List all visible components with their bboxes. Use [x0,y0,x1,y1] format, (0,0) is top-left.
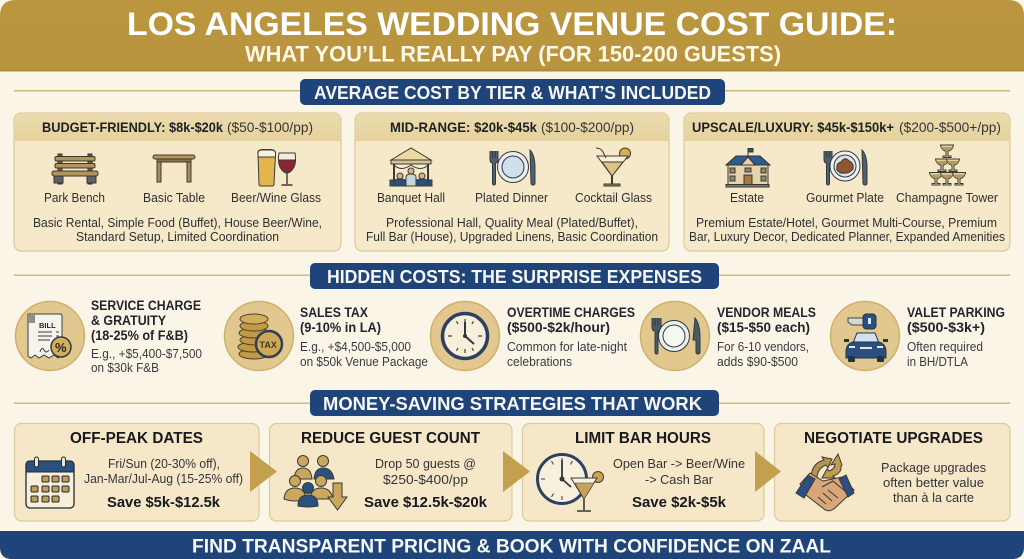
panel: reduce guest count [270,424,512,521]
tier description: Standard Setup, Limited Coordination [76,229,279,244]
title: LOS ANGELES WEDDING VENUE COST GUIDE: [127,6,897,42]
heading: SALES TAX [300,305,368,320]
heading: VENDOR MEALS [717,305,816,320]
section heading: money-saving strategies [310,390,719,416]
arrow: step 1 to 2 [250,451,277,492]
detail: celebrations [507,354,572,369]
detail: Common for late-night [507,339,627,354]
tier heading: UPSCALE/LUXURY: $45k-$150k+ [692,119,894,135]
heading: ($500-$2k/hour) [507,320,610,335]
detail: adds $90-$500 [717,354,798,369]
label: gourmet plate: Gourmet Plate [806,190,884,205]
label: beer/wine glass: Beer/Wine Glass [231,190,321,205]
label: park bench: Park Bench [44,190,105,205]
label: cocktail glass: Cocktail Glass [575,190,652,205]
heading: SERVICE CHARGE [91,298,201,313]
label: plated dinner: Plated Dinner [475,190,549,205]
section heading: hidden costs: HIDDEN COSTS: THE SURPRISE EXPENSES [327,267,702,287]
icon: beer and wine glass [258,150,296,186]
icon: cocktail glass [596,148,630,186]
tier description: Basic Rental, Simple Food (Buffet), House Beer/Wine, [33,215,322,230]
icon: calendar [26,457,74,508]
tier heading: ($100-$200/pp) [541,119,634,135]
hidden cost: service charge and gratuity [16,298,202,375]
tier heading: ($50-$100/pp) [227,119,313,135]
detail: E.g., +$4,500-$5,000 [300,339,411,354]
icon: champagne tower [930,145,966,185]
strategy detail: often better value [883,475,984,490]
strategy detail: Jan-Mar/Jul-Aug (15-25% off) [84,471,243,486]
heading: (18-25% of F&B) [91,328,188,343]
hidden cost: valet parking [830,302,1005,370]
hidden cost: vendor meals [640,302,816,370]
panel: off-peak dates [14,424,259,521]
icon: clock and cocktail [538,454,604,511]
title banner [0,0,1024,72]
heading: & GRATUITY [91,313,166,328]
strategy detail: Open Bar -> Beer/Wine [613,456,745,471]
icon: basic table [153,155,195,182]
heading: ($500-$3k+) [907,320,985,335]
section heading: average cost by tier: AVERAGE COST BY TIER & WHAT’S INCLUDED [314,83,711,103]
footer banner: FIND TRANSPARENT PRICING & BOOK WITH CONFIDENCE ON ZAAL [192,536,831,558]
detail: on $50k Venue Package [300,354,428,369]
detail: E.g., +$5,400-$7,500 [91,346,202,361]
heading: OVERTIME CHARGES [507,305,635,320]
savings: Save $2k-$5k [632,494,727,511]
strategy heading: OFF-PEAK DATES [70,430,203,447]
tier description: Bar, Luxury Decor, Dedicated Planner, Expanded Amenities [689,229,1005,244]
hidden cost: overtime charges [430,302,635,370]
icon: coins with tax badge [224,302,294,370]
label: estate: Estate [730,190,764,205]
panel: negotiate upgrades [774,424,1010,521]
savings: Save $5k-$12.5k [107,494,221,511]
icon: handshake with arrows [796,454,854,511]
strategy detail: Package upgrades [881,460,986,475]
icon: clock [430,302,500,370]
icon: car and key [830,302,900,370]
icon: park bench [52,154,98,184]
detail: on $30k F&B [91,360,159,375]
strategy heading: REDUCE GUEST COUNT [301,430,480,447]
icon: guests with down arrow [284,456,347,510]
panel: limit bar hours [522,424,764,521]
heading: (9-10% in LA) [300,320,381,335]
detail: For 6-10 vendors, [717,339,809,354]
savings: Save $12.5k-$20k [364,494,488,511]
strategy detail: -> Cash Bar [645,472,714,487]
heading: ($15-$50 each) [717,320,810,335]
tier heading: ($200-$500+/pp) [899,119,1001,135]
icon: coins with tax badge: TAX [260,340,277,350]
label: champagne tower: Champagne Tower [896,190,999,205]
icon: banquet hall [390,148,432,186]
tier heading: BUDGET-FRIENDLY: $8k-$20k [42,119,223,135]
label: basic table: Basic Table [143,190,205,205]
hidden cost: sales tax [224,302,428,370]
strategy detail: than à la carte [893,490,974,505]
label: banquet hall: Banquet Hall [377,190,445,205]
strategy detail: $250-$400/pp [383,472,468,487]
icon: bill with percent badge: BILL [39,321,56,330]
section heading: money-saving strategies: MONEY-SAVING STRATEGIES THAT WORK [323,394,702,414]
tier description: Premium Estate/Hotel, Gourmet Multi-Course, Premium [696,215,997,230]
icon: bill with percent badge [16,302,84,370]
footer banner [0,531,1024,559]
subtitle: WHAT YOU’LL REALLY PAY (FOR 150-200 GUESTS) [245,42,781,66]
detail: in BH/DTLA [907,354,968,369]
arrow: step 3 to 4 [755,451,781,492]
heading: VALET PARKING [907,305,1005,320]
icon: fork, plate and knife [640,302,710,370]
icon: estate [726,148,770,187]
tier heading: MID-RANGE: $20k-$45k [390,119,537,135]
icon: bill with percent badge: % [55,340,67,355]
icon: plated dinner [490,150,535,185]
strategy detail: Drop 50 guests @ [375,456,476,471]
arrow: step 2 to 3 [503,451,530,492]
detail: Often required [907,339,983,354]
strategy heading: LIMIT BAR HOURS [575,430,711,447]
panel: upscale/luxury tier [684,113,1010,251]
panel: mid-range tier [355,113,669,251]
strategy detail: Fri/Sun (20-30% off), [108,456,220,471]
strategy heading: NEGOTIATE UPGRADES [804,430,983,447]
panel: budget-friendly tier [14,113,341,251]
icon: gourmet plate [824,150,867,185]
tier description: Full Bar (House), Upgraded Linens, Basic Coordination [366,229,658,244]
tier description: Professional Hall, Quality Meal (Plated/Buffet), [386,215,638,230]
